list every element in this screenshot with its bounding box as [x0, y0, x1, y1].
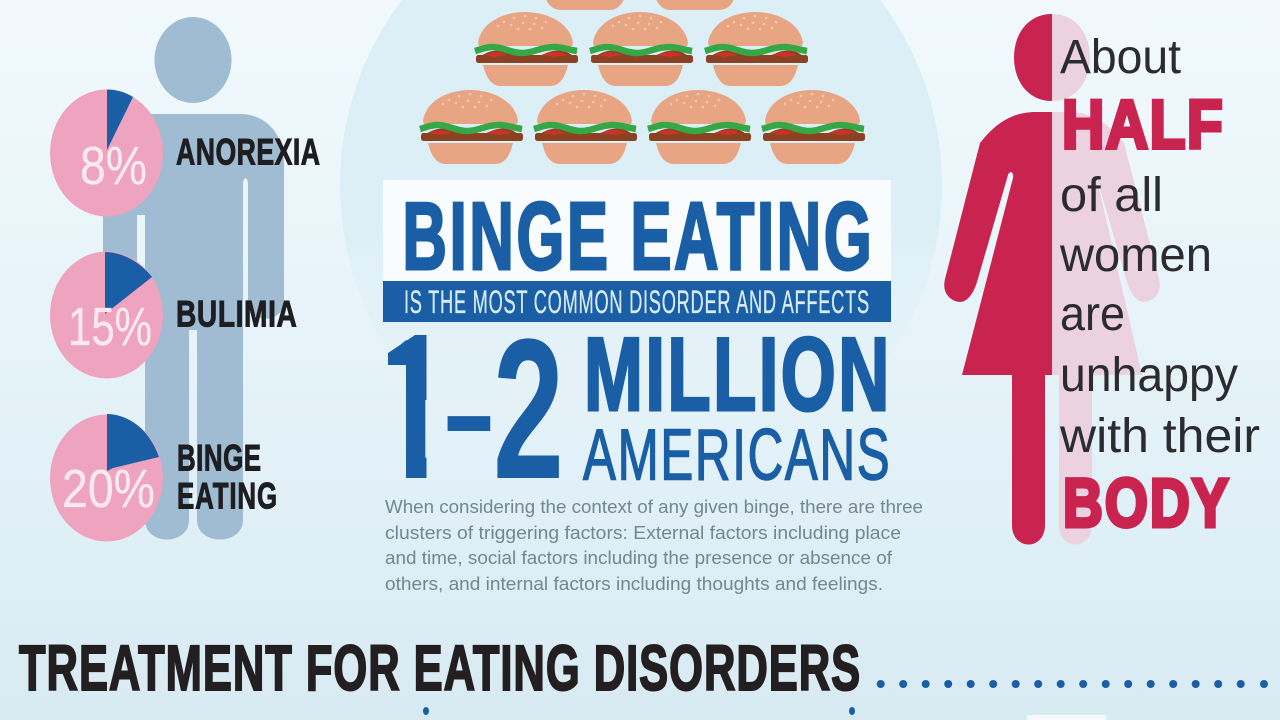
background circle: [340, 0, 942, 490]
text block: triggering factors: and time, social factors including the presence or absence of: [385, 547, 893, 568]
pie chart: bulimia 15%: [50, 252, 163, 378]
label: bulimia: BULIMIA: [176, 293, 297, 334]
icon: burger pile: [420, 0, 865, 164]
statistic: million: MILLION: [584, 315, 889, 432]
statistic: 1-2: [388, 335, 559, 478]
text: about half of all women are unhappy with their body: [1059, 31, 1260, 542]
pie chart: binge eating 20%: [50, 414, 163, 542]
statistic: americans: AMERICANS: [583, 415, 890, 496]
dotted connector: [423, 680, 1268, 715]
text: about half of all women are unhappy with their body: HALF: [1062, 86, 1223, 163]
label: binge eating: BINGE: [177, 437, 261, 479]
label: anorexia: ANOREXIA: [176, 131, 320, 173]
text block: triggering factors: clusters of triggering factors: External factors including place: [385, 522, 901, 543]
text block: triggering factors: [385, 496, 923, 594]
value: 15%: 15%: [68, 297, 152, 357]
icon: person silhouette: [103, 17, 284, 540]
banner: white title background: [383, 180, 891, 282]
heading: binge eating: BINGE EATING: [402, 183, 872, 290]
value: 8%: 8%: [80, 136, 147, 196]
statistic: 1-2: 2: [493, 298, 564, 521]
cropped white panel: [1027, 715, 1106, 720]
text block: triggering factors: When considering the context of any given binge, there are three: [385, 496, 923, 517]
panel: eating disorder prevalence: [50, 17, 320, 542]
label: binge eating: EATING: [177, 475, 277, 517]
value: 20%: 20%: [62, 459, 155, 519]
statistic: 1-2: -: [441, 344, 497, 483]
text: about half of all women are unhappy with their body: of all: [1060, 169, 1163, 222]
pie chart: anorexia 8%: [50, 90, 163, 216]
text: about half of all women are unhappy with their body: women: [1059, 229, 1212, 282]
text block: triggering factors: others, and internal factors including thoughts and feelings.: [385, 573, 883, 594]
label: binge eating: [177, 437, 277, 517]
panel: half of all women: [944, 14, 1260, 544]
statistic: 1-2: 1: [369, 297, 454, 521]
text: about half of all women are unhappy with their body: unhappy: [1060, 349, 1238, 402]
text: about half of all women are unhappy with their body: BODY: [1063, 465, 1229, 542]
band: most common disorder: IS THE MOST COMMON DISORDER AND AFFECTS: [404, 284, 869, 320]
text: about half of all women are unhappy with their body: About: [1060, 31, 1181, 84]
heading: treatment for eating disorders: TREATMENT FOR EATING DISORDERS: [19, 632, 860, 704]
text: about half of all women are unhappy with their body: with their: [1059, 410, 1260, 463]
text: about half of all women are unhappy with their body: are: [1060, 288, 1125, 341]
panel: binge eating headline: [383, 180, 891, 481]
icon: woman silhouette, pale half: [1052, 14, 1160, 544]
icon: woman silhouette, red half: [944, 14, 1052, 544]
